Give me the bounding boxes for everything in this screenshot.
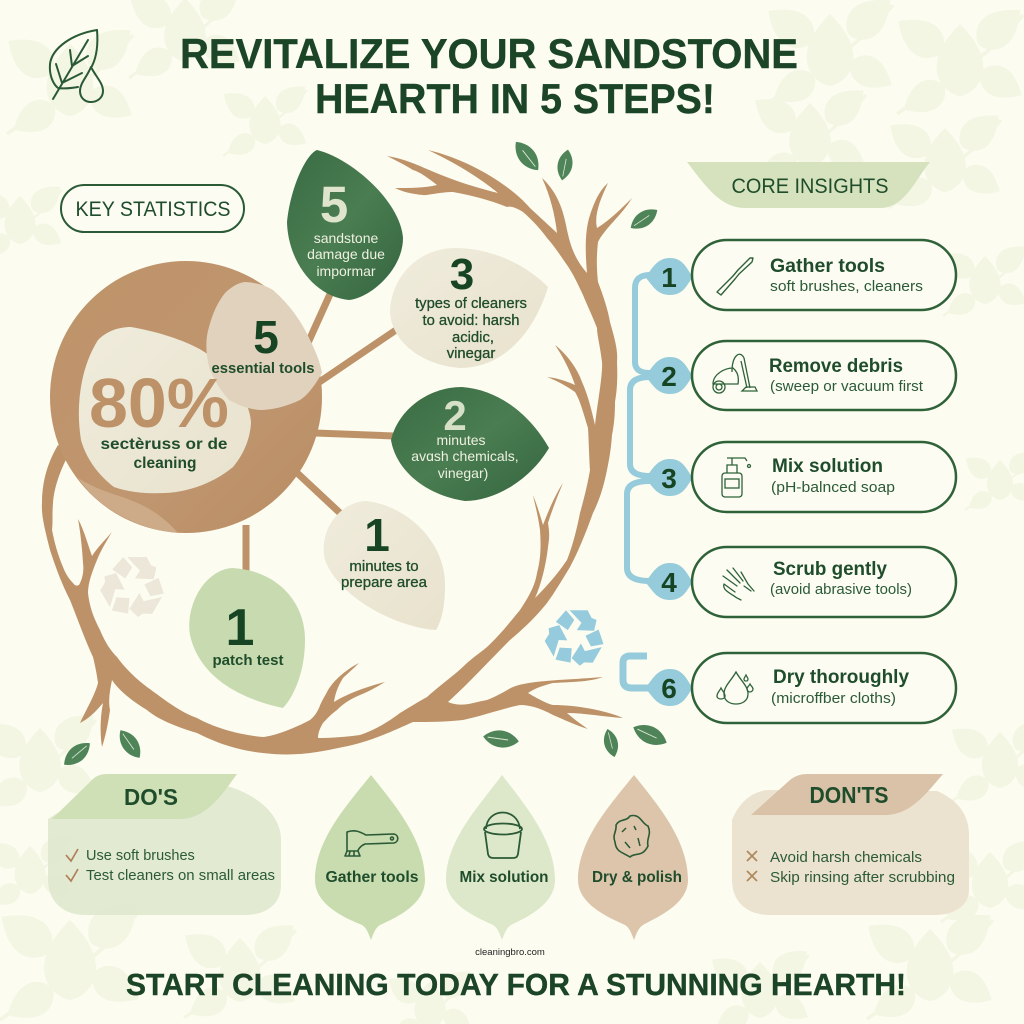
stat leaf: 5 sandstone damage bbox=[287, 150, 403, 300]
panel: do's: DO'S bbox=[124, 784, 178, 810]
title: REVITALIZE YOUR SANDSTONE bbox=[180, 30, 798, 77]
stat: 5 essential tools: 5 bbox=[253, 311, 279, 363]
icon: pale recycle symbol bbox=[95, 557, 169, 622]
step 4: Scrub gently bbox=[773, 559, 887, 580]
leaf: mix solution: Mix solution bbox=[460, 869, 548, 886]
footer call to action: START CLEANING TODAY FOR A STUNNING HEARTH! bbox=[126, 968, 906, 1002]
step 5: Dry thoroughly bbox=[773, 667, 909, 688]
main stat circle bbox=[50, 261, 322, 533]
stat leaf: 2 minutes: vinegar) bbox=[438, 465, 488, 481]
step 2: Remove debris bbox=[769, 356, 903, 377]
stat leaf: 5 sandstone damage: damage due bbox=[307, 246, 385, 262]
step connector line bbox=[623, 275, 650, 688]
leaf: gather tools bbox=[315, 775, 425, 940]
step 2: (sweep or vacuum first bbox=[770, 378, 924, 395]
source credit: cleaningbro.com bbox=[475, 947, 545, 958]
stat: 80%: cleaning bbox=[134, 455, 196, 472]
step 3: Mix solution bbox=[772, 456, 883, 477]
step 4: (avoid abrasive tools) bbox=[770, 581, 912, 598]
stat: 5 essential tools: essential tools bbox=[212, 361, 314, 377]
panel: don'ts: Skip rinsing after scrubbing bbox=[770, 869, 955, 886]
step 3 bbox=[645, 442, 956, 512]
stat leaf: 2 minutes bbox=[391, 387, 549, 501]
stat leaf: 5 sandstone damage: sandstone bbox=[314, 230, 379, 246]
icon: soap bottle bbox=[722, 458, 750, 497]
stat leaf: 5 sandstone damage: impormar bbox=[316, 263, 376, 279]
step 5: 6 bbox=[661, 673, 677, 704]
leaf: mix solution bbox=[446, 775, 555, 940]
stat leaf: 2 minutes: avɑsh chemicals, bbox=[411, 448, 519, 464]
stat leaf: 1 patch test: 1 bbox=[226, 599, 254, 657]
step 1: soft brushes, cleaners bbox=[770, 278, 923, 295]
leaf: dry and polish: Dry & polish bbox=[592, 869, 682, 886]
key statistics badge bbox=[61, 185, 244, 232]
leaf: dry and polish bbox=[578, 775, 688, 940]
stat leaf: 3 types of cleaners: 3 bbox=[450, 250, 474, 299]
stat leaf: 1 minutes to prepare area: prepare area bbox=[341, 574, 428, 591]
stat leaf: 5 sandstone damage: 5 bbox=[320, 176, 348, 233]
core insights banner bbox=[687, 162, 930, 208]
icon: hand bbox=[723, 568, 754, 600]
panel: do's: Test cleaners on small areas bbox=[86, 868, 275, 884]
step 3: 3 bbox=[661, 463, 677, 494]
title bbox=[180, 30, 798, 122]
stat leaf: 3 types of cleaners: types of cleaners bbox=[415, 296, 527, 312]
icon: water drops bbox=[717, 672, 753, 704]
panel: don'ts bbox=[732, 774, 969, 915]
step 3: (pH-balnced soap bbox=[771, 479, 895, 496]
stat leaf: 2 minutes: 2 bbox=[443, 392, 467, 439]
step 4: 4 bbox=[661, 567, 677, 598]
icon: brush bbox=[717, 258, 753, 295]
connector lines bbox=[246, 292, 396, 572]
stat: 80%: 80% bbox=[89, 364, 229, 442]
icon: vacuum bbox=[713, 354, 757, 393]
panel: do's bbox=[48, 774, 281, 915]
key statistics badge: KEY STATISTICS bbox=[76, 197, 230, 221]
stat leaf: 1 patch test bbox=[189, 568, 305, 708]
small leaves bbox=[59, 137, 670, 771]
icon: blue recycle symbol bbox=[540, 610, 609, 671]
panel: do's: Use soft brushes bbox=[86, 848, 195, 864]
stat: 5 essential tools bbox=[206, 282, 322, 410]
stat leaf: 1 minutes to prepare area: minutes to bbox=[349, 558, 419, 575]
stat leaf: 1 patch test: patch test bbox=[212, 652, 284, 669]
stat leaf: 3 types of cleaners: acidic, bbox=[452, 330, 494, 346]
title: HEARTH IN 5 STEPS! bbox=[315, 75, 715, 122]
stat leaf: 2 minutes: minutes bbox=[436, 432, 486, 448]
stat leaf: 3 types of cleaners: to avoid: harsh bbox=[422, 313, 520, 329]
step 4 bbox=[645, 547, 956, 617]
step 1: 1 bbox=[661, 262, 677, 293]
icon: leaf with water drop bbox=[50, 30, 103, 102]
step 1: Gather tools bbox=[770, 256, 885, 277]
stat leaf: 1 minutes to prepare area: 1 bbox=[364, 509, 390, 561]
stat: 80%: sectèruss or de bbox=[100, 436, 228, 453]
step 2: 2 bbox=[661, 361, 677, 392]
stat leaf: 1 minutes to prepare area bbox=[324, 501, 445, 630]
step 5: (microffber cloths) bbox=[771, 690, 896, 707]
core insights banner: CORE INSIGHTS bbox=[732, 174, 888, 198]
panel: don'ts: DON'TS bbox=[810, 782, 888, 808]
leaf: gather tools: Gather tools bbox=[326, 869, 418, 886]
step 2 bbox=[645, 341, 956, 410]
step 5 bbox=[645, 653, 956, 723]
tree branches bbox=[42, 150, 632, 754]
step 1 bbox=[645, 240, 956, 310]
panel: don'ts: Avoid harsh chemicals bbox=[770, 849, 922, 866]
stat leaf: 3 types of cleaners: vinegar bbox=[447, 346, 495, 362]
stat leaf: 3 types of cleaners bbox=[390, 248, 548, 368]
